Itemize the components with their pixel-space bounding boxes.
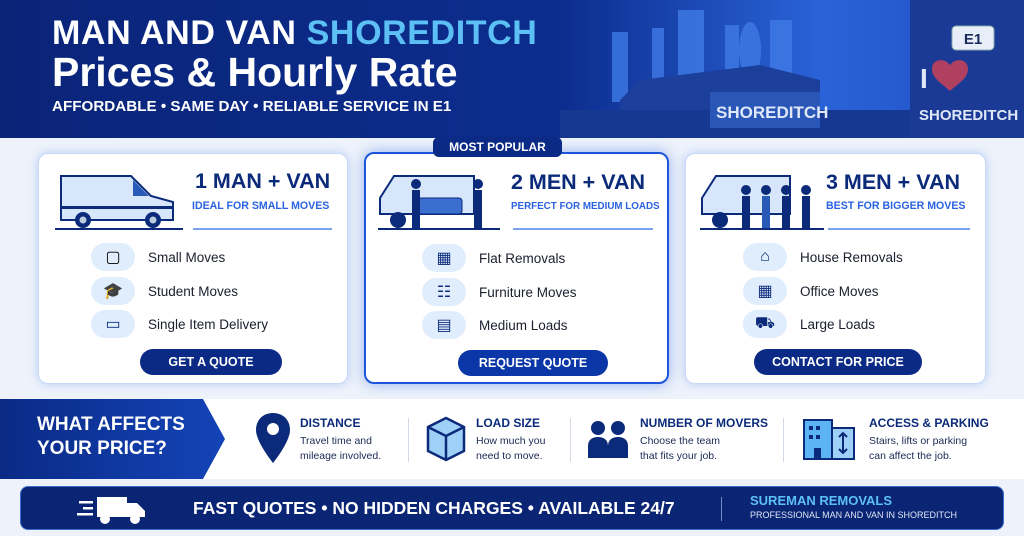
icon: fast truck [77, 497, 145, 524]
icon: people [588, 421, 628, 458]
list: Small Moves [148, 250, 225, 264]
card: 3 men + van: BEST FOR BIGGER MOVES [826, 200, 966, 212]
header banner [0, 0, 1024, 138]
panel: what affects your price [0, 399, 1024, 479]
factor: distance [300, 416, 381, 462]
card: 2 men + van [364, 152, 669, 384]
factor: access & parking [869, 416, 989, 462]
button [458, 350, 608, 376]
factor: number of movers [640, 416, 768, 462]
list [91, 243, 268, 338]
icon: van [55, 175, 183, 230]
factor: access & parking: ACCESS & PARKING [869, 416, 989, 430]
list: Medium Loads [479, 318, 568, 332]
factor: access & parking: Stairs, lifts or parking [869, 435, 967, 447]
list: 🎓 [103, 283, 123, 300]
icon: van with three movers [700, 175, 824, 230]
title: MAN AND VAN SHOREDITCH [52, 14, 537, 52]
list: Furniture Moves [479, 284, 577, 300]
factor: number of movers: Choose the team [640, 435, 720, 447]
list: Student Moves [148, 284, 238, 298]
icon: box [426, 416, 466, 462]
factor: access & parking: can affect the job. [869, 450, 952, 462]
list: Single Item Delivery [148, 316, 268, 332]
tagline: AFFORDABLE • SAME DAY • RELIABLE SERVICE IN E1 [52, 98, 451, 115]
brand [750, 493, 957, 520]
tagline: FAST QUOTES • NO HIDDEN CHARGES • AVAILABLE 24/7 [193, 498, 675, 518]
card: 1 man + van: IDEAL FOR SMALL MOVES [192, 200, 329, 212]
heading: 1 MAN + VAN [195, 169, 330, 193]
list: House Removals [800, 250, 903, 264]
factor: number of movers: NUMBER OF MOVERS [640, 416, 768, 430]
button: REQUEST QUOTE [479, 356, 587, 370]
heading arrow: WHAT AFFECTS [37, 414, 185, 435]
skyline illustration: I [920, 63, 928, 94]
skyline illustration [560, 0, 1024, 138]
list: Large Loads [800, 316, 875, 332]
factor: load size [476, 416, 545, 462]
card: 1 man + van [38, 153, 348, 384]
list: ⛟ [755, 315, 775, 332]
list: ▭ [105, 316, 121, 333]
list [422, 244, 577, 339]
skyline illustration: SHOREDITCH [919, 107, 1018, 124]
factor: distance: Travel time and [300, 435, 372, 447]
brand: SUREMAN REMOVALS [750, 493, 892, 508]
button: CONTACT FOR PRICE [772, 355, 904, 369]
factor: load size: How much you [476, 435, 545, 447]
list: ☷ [437, 284, 451, 301]
button: GET A QUOTE [168, 355, 254, 369]
card: 3 men + van [685, 153, 986, 384]
heading: 2 MEN + VAN [511, 170, 645, 194]
list: ▦ [436, 250, 452, 267]
heading arrow [0, 399, 225, 479]
list: ⌂ [760, 248, 770, 265]
button [754, 349, 922, 375]
factor: distance: mileage involved. [300, 450, 381, 462]
subtitle: Prices & Hourly Rate [52, 49, 458, 95]
heading arrow: YOUR PRICE? [37, 438, 167, 459]
list [743, 243, 903, 338]
badge: most popular [433, 137, 562, 157]
skyline illustration: E1 [964, 31, 982, 48]
badge: most popular: MOST POPULAR [449, 140, 546, 154]
list: Office Moves [800, 284, 879, 298]
factor: load size: LOAD SIZE [476, 416, 540, 430]
list: ▢ [105, 249, 121, 266]
skyline illustration: SHOREDITCH [716, 103, 828, 122]
list: ▦ [757, 283, 773, 300]
icon: location pin [256, 413, 290, 463]
card: 2 men + van: PERFECT FOR MEDIUM LOADS [511, 201, 660, 212]
button [140, 349, 282, 375]
brand: PROFESSIONAL MAN AND VAN IN SHOREDITCH [750, 510, 957, 520]
heading: 3 MEN + VAN [826, 170, 960, 194]
factor: distance: DISTANCE [300, 416, 360, 430]
factor: number of movers: that fits your job. [640, 450, 717, 462]
footer bar [20, 486, 1004, 530]
icon: building [803, 419, 855, 460]
icon: van with movers [378, 175, 500, 230]
list: ▤ [436, 317, 452, 334]
list: Flat Removals [479, 250, 565, 266]
factor: load size: need to move. [476, 450, 543, 462]
